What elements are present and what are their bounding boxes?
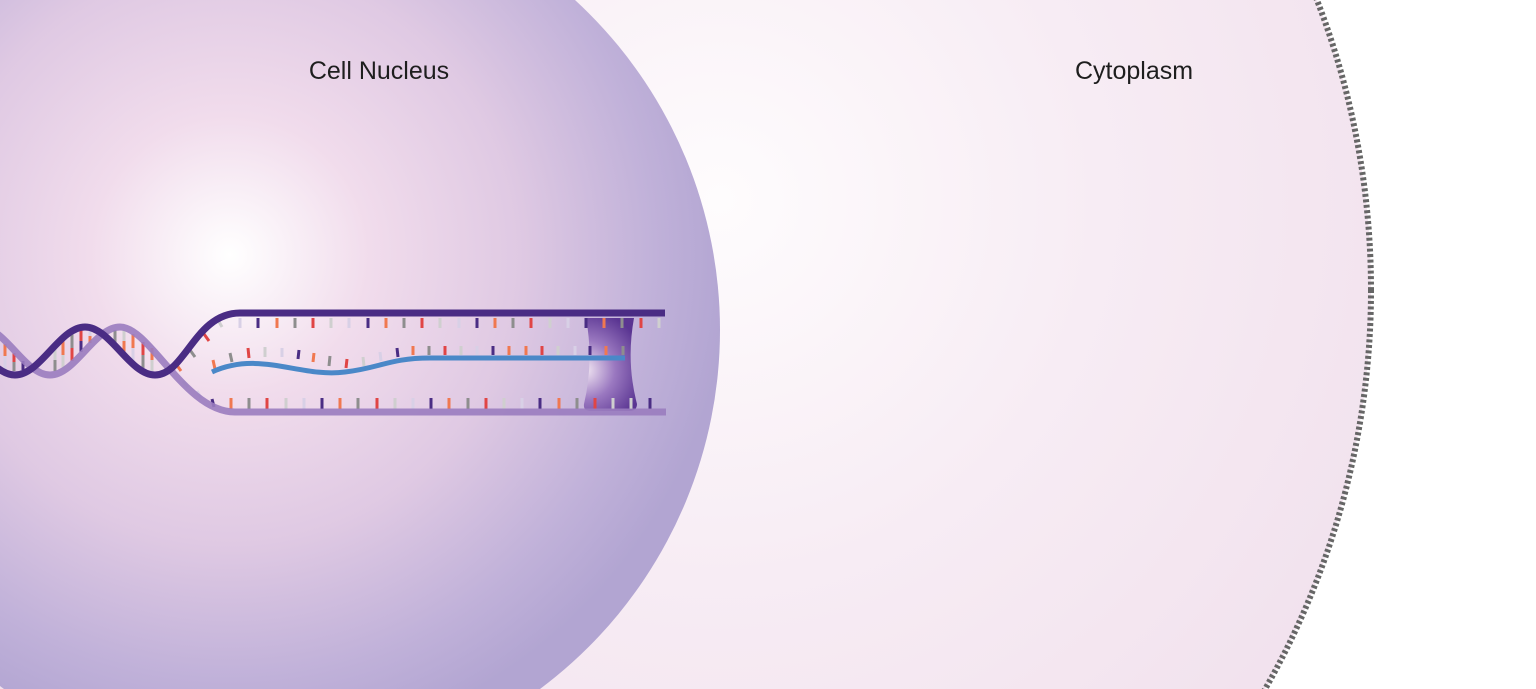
RNA polymerase (584, 318, 637, 411)
label: Cell Nucleus: Cell Nucleus (309, 57, 449, 85)
mRNA strand (212, 358, 625, 373)
helix base pairs (5, 320, 222, 407)
DNA transcription diagram (0, 313, 666, 412)
mRNA bases (213, 346, 623, 369)
label: Cytoplasm: Cytoplasm (1075, 57, 1193, 85)
template strand (dark purple) (0, 313, 665, 375)
nucleus (0, 0, 720, 689)
coding strand bases (231, 398, 650, 409)
coding strand (light purple) (0, 327, 666, 412)
template strand bases (240, 318, 659, 328)
